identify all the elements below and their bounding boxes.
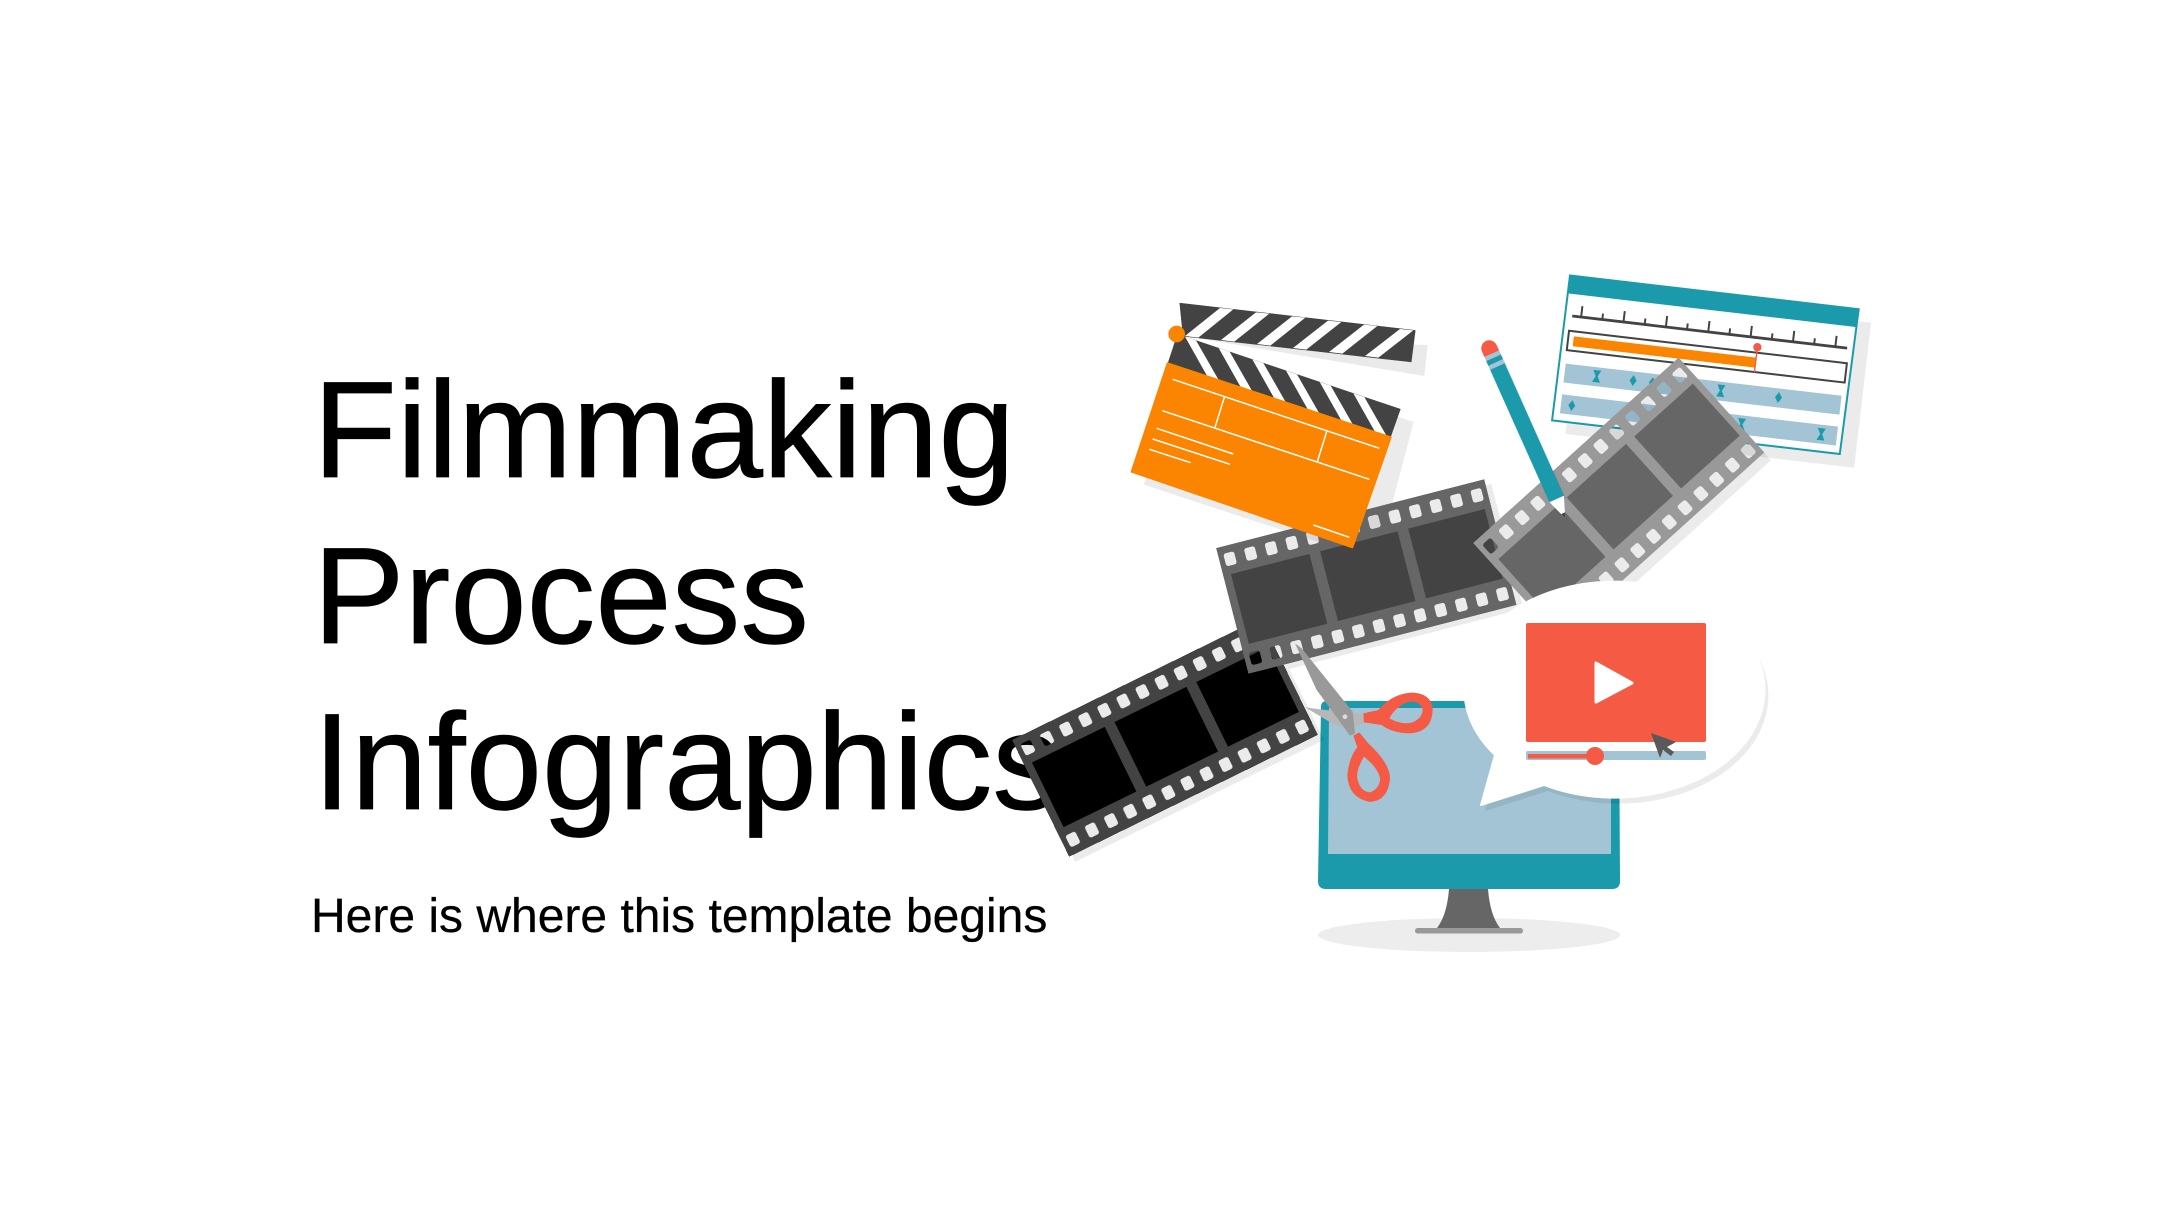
speech bubble: [1464, 582, 1768, 811]
title: Process: [313, 520, 809, 673]
progress knob: [1586, 747, 1604, 765]
cursor arrow: [1651, 733, 1676, 758]
blue track one: [1564, 364, 1842, 415]
timeline ruler: [1572, 305, 1848, 348]
monitor: [1318, 701, 1620, 934]
bubble shadow: [1468, 588, 1768, 811]
timeline panel: [1551, 275, 1872, 468]
film strip: black: [1012, 618, 1318, 857]
monitor floor shadow: [1318, 918, 1620, 952]
clapper slate lines: [1149, 379, 1379, 537]
title: Infographics: [313, 686, 1061, 839]
clapper stripe board: [1168, 334, 1401, 437]
timeline shadow: [1565, 289, 1871, 468]
video screen: [1526, 623, 1706, 742]
clapper body: [1132, 363, 1391, 547]
progress track: [1526, 751, 1706, 760]
pencil body: [1479, 338, 1573, 521]
scissors blade: rear: [1305, 707, 1365, 728]
orange clip: [1573, 336, 1756, 368]
pencil shadow: [1490, 346, 1566, 502]
scissors: [1295, 643, 1433, 802]
bubble body: [1464, 582, 1764, 805]
timeline header: [1568, 276, 1859, 327]
video player: [1526, 623, 1706, 765]
scissors handle: upper: [1363, 693, 1433, 733]
pencil: [1479, 338, 1573, 521]
clapper arm: [1180, 303, 1415, 362]
playhead: [1750, 343, 1762, 373]
title: Filmmaking: [313, 354, 1015, 507]
scissors pivot: [1343, 714, 1347, 719]
title: [313, 354, 1061, 839]
blue track two: [1560, 394, 1838, 445]
timeline track box: [1567, 331, 1847, 383]
play button: [1596, 663, 1632, 702]
timeline body: [1552, 275, 1859, 454]
scissors blade: front: [1295, 643, 1355, 736]
film strip: dark grey: [1216, 479, 1517, 674]
subtitle: Here is where this template begins: [311, 890, 1047, 943]
scissors handle: lower: [1347, 732, 1390, 802]
clapper hinge: [1168, 326, 1185, 342]
progress fill: [1528, 754, 1592, 758]
clapperboard: [1132, 303, 1415, 547]
keyframe markers: [1568, 367, 1829, 441]
illustration: filmmaking collage: [1012, 275, 1872, 952]
clapperboard shadow: [1144, 336, 1428, 561]
film strip: light grey: [1473, 358, 1764, 602]
film strip shadows: [1012, 357, 1771, 862]
